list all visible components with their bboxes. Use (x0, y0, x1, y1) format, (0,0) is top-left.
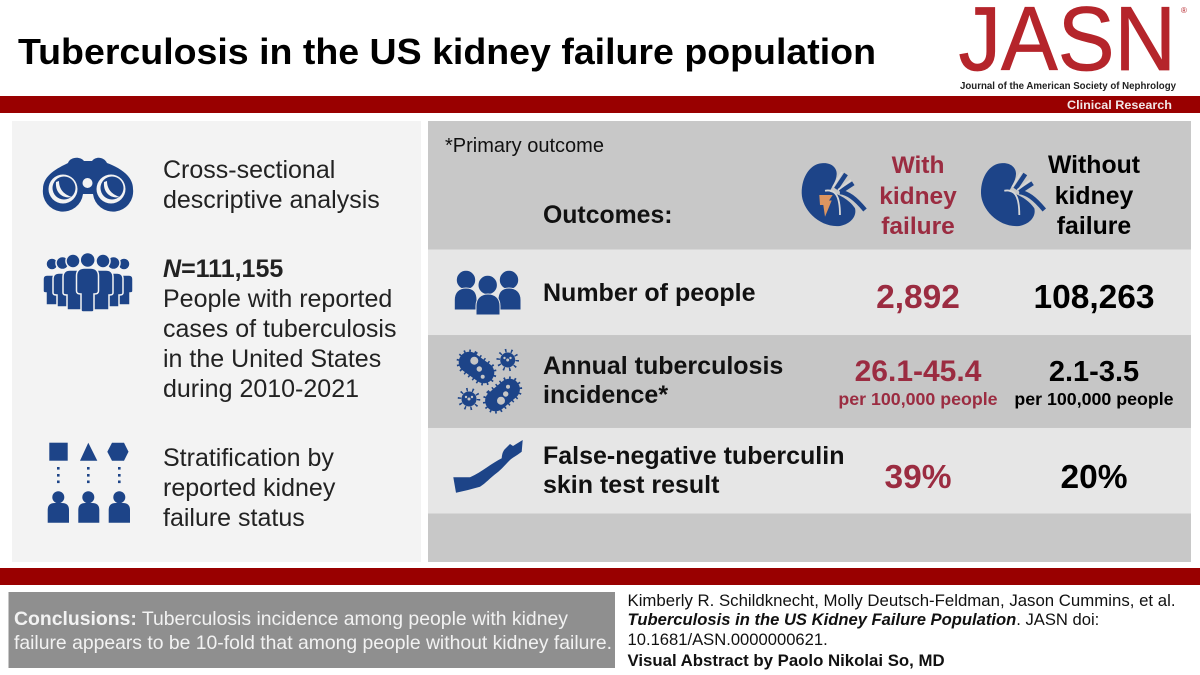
row: annual tuberculosis incidence: Annual tuberculosis (543, 352, 783, 380)
N text: People with reported (163, 285, 392, 313)
N text: =111,155 (181, 255, 283, 283)
row: number of people (454, 270, 1155, 316)
JASN logo: ® (1181, 6, 1187, 15)
row: annual tuberculosis incidence (455, 348, 1174, 416)
citation (628, 591, 1176, 670)
stratification text: Stratification by (163, 444, 334, 472)
stratification text: reported kidney (163, 474, 336, 502)
icon: crowd of people (43, 252, 133, 312)
row: annual tuberculosis incidence: 2.1-3.5 (1049, 356, 1139, 388)
icon: stratification (48, 443, 130, 523)
row: false-negative tuberculin skin test result (453, 440, 1128, 499)
row: false-negative tuberculin skin test result: skin test result (543, 471, 720, 499)
citation: Tuberculosis in the US Kidney Failure Population. JASN doi: (628, 610, 1099, 629)
column heading: with kidney failure: With (892, 152, 944, 179)
column heading: with kidney failure: kidney (879, 183, 957, 210)
icon: three people (454, 270, 521, 315)
row: false-negative tuberculin skin test result: False-negative tuberculin (543, 442, 844, 470)
row: annual tuberculosis incidence: incidence* (543, 381, 668, 409)
N text: during 2010-2021 (163, 375, 359, 403)
row: number of people: Number of people (543, 279, 756, 307)
citation: Kimberly R. Schildknecht, Molly Deutsch-Feldman, Jason Cummins, et al. (628, 591, 1176, 610)
row: number of people: 2,892 (876, 279, 960, 316)
bottom red bar (0, 568, 1200, 585)
top red banner (0, 96, 1200, 113)
column heading: without kidney failure: kidney (1055, 183, 1133, 210)
row: false-negative tuberculin skin test result: 20% (1060, 459, 1128, 496)
column heading: without kidney failure: failure (1057, 213, 1131, 240)
outcomes heading: Outcomes: (543, 202, 673, 229)
N text: in the United States (163, 345, 381, 373)
column heading: with kidney failure: failure (881, 213, 955, 240)
N text: N (163, 255, 182, 283)
conclusions box: Tuberculosis incidence among people with kidney (137, 608, 568, 630)
icon: binoculars (43, 158, 133, 212)
citation: Visual Abstract by Paolo Nikolai So, MD (628, 651, 945, 670)
icon: arm (453, 440, 523, 493)
icon: kidney with lightning bolt (802, 163, 865, 226)
conclusions box: failure appears to be 10-fold that among people without kidney failure. (14, 632, 612, 654)
title: Tuberculosis in the US kidney failure population (18, 31, 876, 72)
row: false-negative tuberculin skin test result: 39% (884, 459, 952, 496)
icon: bacteria (455, 348, 524, 416)
row: annual tuberculosis incidence: 26.1-45.4 (855, 355, 982, 388)
panel: outcomes table (428, 121, 1191, 562)
row: number of people: 108,263 (1033, 279, 1155, 316)
design text: descriptive analysis (163, 186, 380, 214)
primary outcome note: *Primary outcome (445, 135, 604, 157)
conclusions box (8, 592, 615, 668)
column heading: without kidney failure: Without (1048, 152, 1140, 179)
conclusions box: Conclusions: (14, 608, 137, 630)
design text: Cross-sectional (163, 156, 335, 184)
stratification text: failure status (163, 504, 305, 532)
N text: cases of tuberculosis (163, 315, 396, 343)
top red banner: Clinical Research (1067, 98, 1172, 112)
JASN logo: Journal of the American Society of Nephrology (960, 81, 1176, 92)
row: annual tuberculosis incidence: per 100,000 people (1014, 389, 1174, 409)
icon: kidney (981, 163, 1044, 226)
row: annual tuberculosis incidence: per 100,000 people (838, 389, 998, 409)
citation: 10.1681/ASN.0000000621. (628, 630, 828, 649)
panel: study design (12, 121, 421, 562)
